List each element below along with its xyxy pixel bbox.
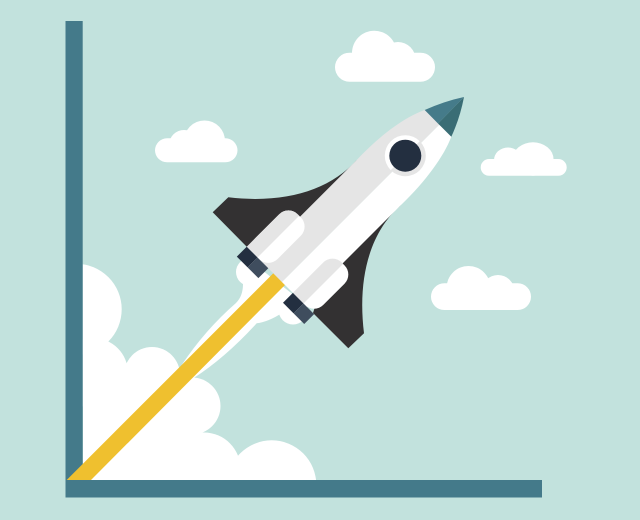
exhaust smoke cloud [82,264,316,480]
porthole window [385,135,426,176]
body: light half [282,123,451,303]
lower booster nozzle [283,293,314,324]
cloud: lower right [431,266,531,310]
cloud: right [481,142,567,176]
cloud: upper left [155,120,238,162]
rocket [213,97,464,348]
rocket flame trail [67,273,285,480]
lower wing [313,205,401,348]
upper booster [247,205,310,268]
body: shaded half [258,110,441,282]
rocket launch infographic [66,21,567,498]
upper booster nozzle [237,247,268,278]
engine exhaust glow [182,258,308,378]
upper wing [213,160,357,247]
chart axes [66,21,542,498]
nose cone [425,97,464,137]
lower booster [293,253,354,314]
cloud: top centre [335,31,435,82]
